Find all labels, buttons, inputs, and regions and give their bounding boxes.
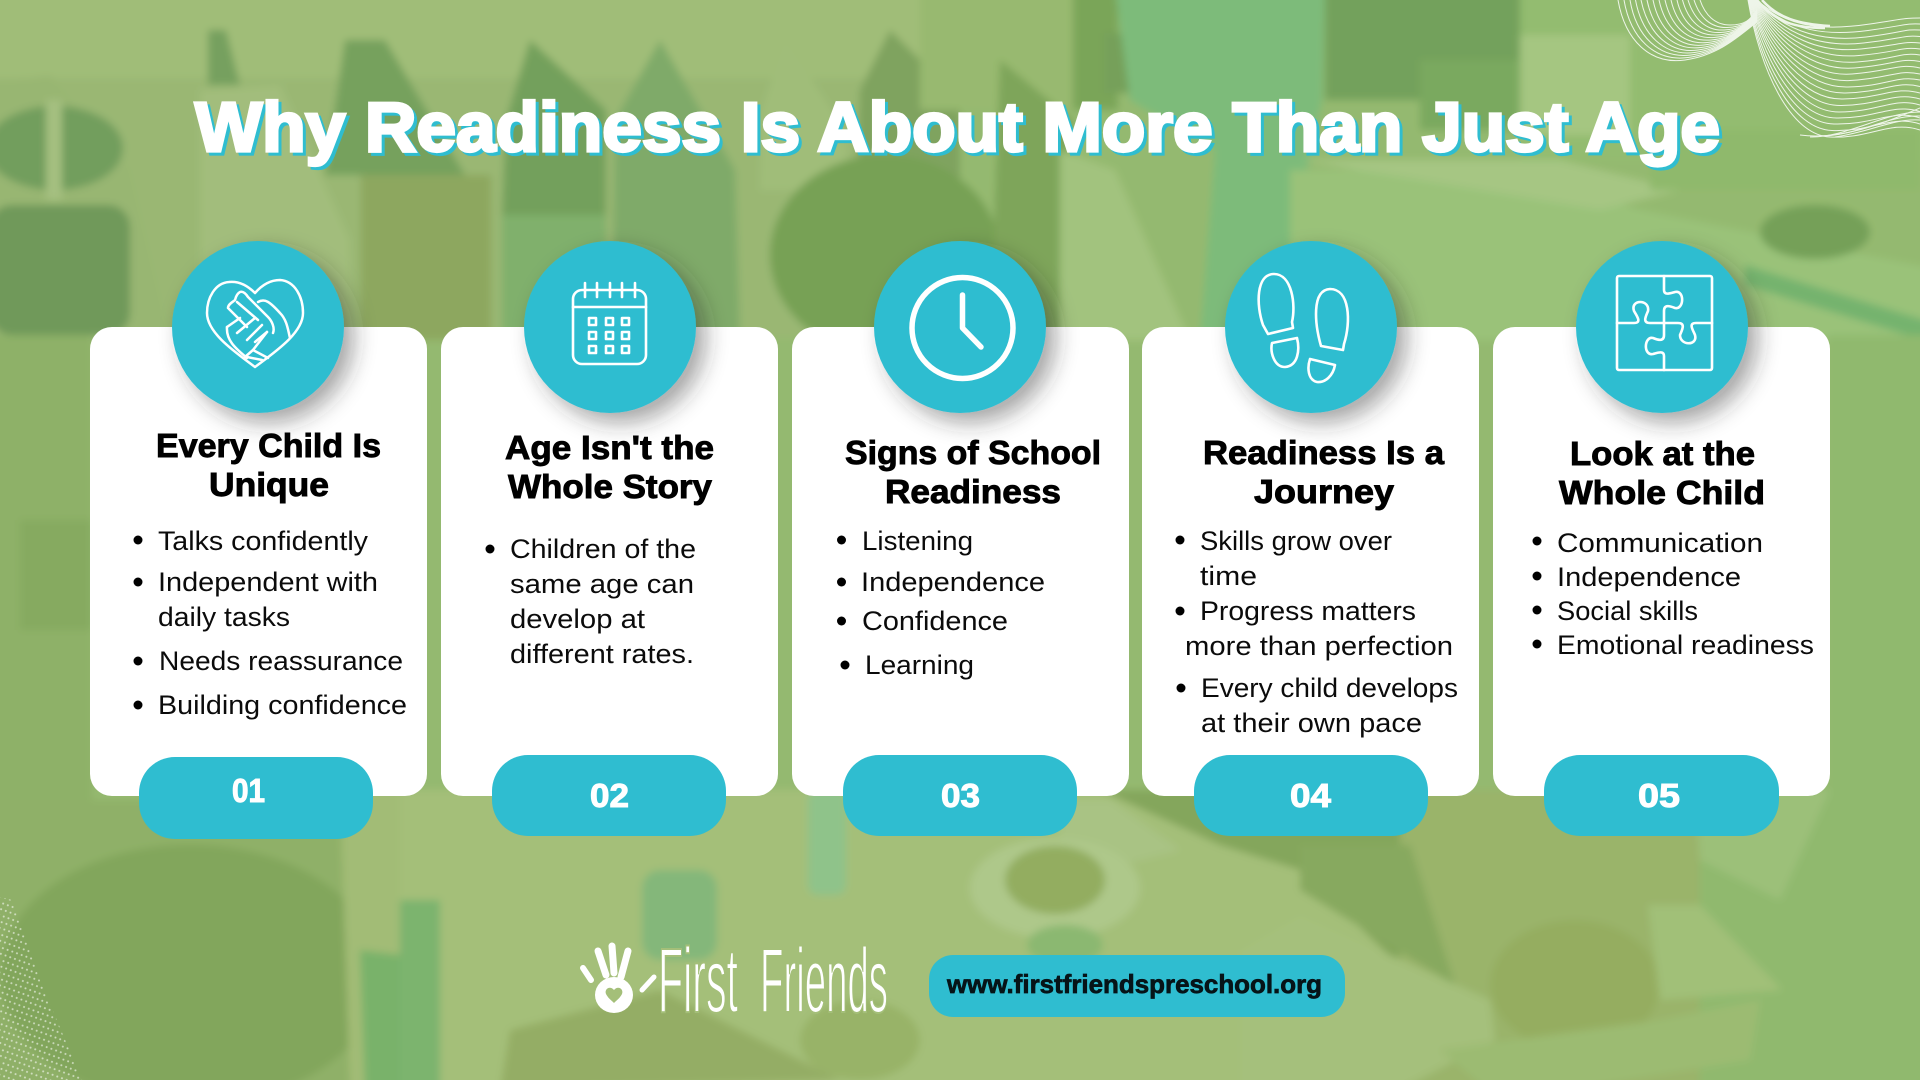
card 3 heading (845, 434, 1101, 510)
card 1 number pill: 01 (232, 772, 265, 809)
card 3 bullet list: Confidence (862, 606, 1008, 636)
card 1 number pill (139, 757, 373, 839)
card 5 bullet list: Communication (1557, 528, 1763, 558)
card 2 bullet list: different rates. (510, 639, 694, 669)
card 4 bullet list: Progress matters (1200, 596, 1416, 626)
card 3 number pill: 03 (941, 777, 980, 814)
card 4 bullet list: at their own pace (1201, 708, 1422, 738)
card 4 bullet list (1176, 526, 1458, 738)
card 3 bullet list: Independence (861, 567, 1045, 597)
card 2 background (441, 327, 778, 796)
card 1 bullet list: Needs reassurance (159, 646, 403, 676)
card 4 bullet list: time (1200, 561, 1257, 591)
panel: card 5 (1493, 241, 1830, 836)
card 1 bullet list: Talks confidently (158, 526, 369, 556)
card 1 background (90, 327, 427, 796)
card 3 background (792, 327, 1129, 796)
card 2 bullet list: develop at (510, 604, 646, 634)
card 5 bullet list: Social skills (1557, 596, 1698, 626)
card 5 bullet list: Emotional readiness (1557, 630, 1814, 660)
card 4 bullet list: more than perfection (1185, 631, 1453, 661)
card 5 bullet list: Independence (1557, 562, 1741, 592)
card 1 bullet list: daily tasks (158, 602, 290, 632)
card 5 heading: Look at the (1570, 435, 1755, 472)
panel: card 4 (1142, 241, 1479, 836)
card 1 icon: heart with hands (172, 241, 344, 413)
card 3 bullet list: Listening (862, 526, 973, 556)
card 3 heading: Signs of School (845, 434, 1101, 471)
card 4 icon: footprints (1225, 241, 1397, 413)
card 4 heading (1203, 434, 1445, 510)
card 1 heading (156, 427, 381, 503)
icon: hand print (583, 946, 654, 1013)
card 5 number pill (1544, 755, 1779, 836)
logo wordmark: First (658, 930, 738, 1032)
website pill (929, 955, 1345, 1017)
card 5 bullet list (1532, 528, 1814, 660)
card 1 bullet list: Building confidence (158, 690, 407, 720)
decorative dots: bottom left (0, 897, 82, 1080)
panel: card 1 (90, 241, 427, 839)
panel: card 2 (441, 241, 778, 836)
card 2 bullet list (486, 534, 696, 669)
card 5 icon: puzzle (1576, 241, 1748, 413)
logo: First Friends (583, 930, 888, 1032)
card 1 heading: Unique (209, 466, 329, 503)
card 3 number pill (843, 755, 1077, 836)
title: Why Readiness Is About More Than Just Age (195, 88, 1720, 166)
card 4 bullet list: Skills grow over (1200, 526, 1392, 556)
card 1 bullet list: Independent with (158, 567, 378, 597)
card 3 bullet list (837, 526, 1045, 680)
card 2 heading: Age Isn't the (505, 429, 714, 466)
card 3 heading: Readiness (885, 473, 1061, 510)
card 2 heading (505, 429, 714, 505)
card 4 heading: Readiness Is a (1203, 434, 1445, 471)
panel: card 3 (792, 241, 1129, 836)
card 3 bullet list: Learning (865, 650, 974, 680)
card 4 bullet list: Every child develops (1201, 673, 1458, 703)
text: Friends (760, 930, 888, 1032)
card 5 number pill: 05 (1638, 777, 1680, 814)
card 3 icon: clock (874, 241, 1046, 413)
card 2 number pill (492, 755, 726, 836)
card 4 heading: Journey (1254, 473, 1395, 510)
card 4 background (1142, 327, 1479, 796)
card 5 heading: Whole Child (1559, 474, 1765, 511)
card 2 bullet list: same age can (510, 569, 694, 599)
card 2 bullet list: Children of the (510, 534, 696, 564)
card 1 heading: Every Child Is (156, 427, 381, 464)
card 5 heading (1559, 435, 1765, 511)
card 2 heading: Whole Story (508, 468, 713, 505)
card 1 bullet list (134, 526, 407, 720)
card 4 number pill (1194, 755, 1428, 836)
decorative wave: top right (1618, 0, 1920, 137)
website pill: www.firstfriendspreschool.org (946, 969, 1322, 999)
card 2 number pill: 02 (590, 777, 629, 814)
card 4 number pill: 04 (1290, 777, 1332, 814)
card 5 background (1493, 327, 1830, 796)
card 2 icon: calendar (524, 241, 696, 413)
